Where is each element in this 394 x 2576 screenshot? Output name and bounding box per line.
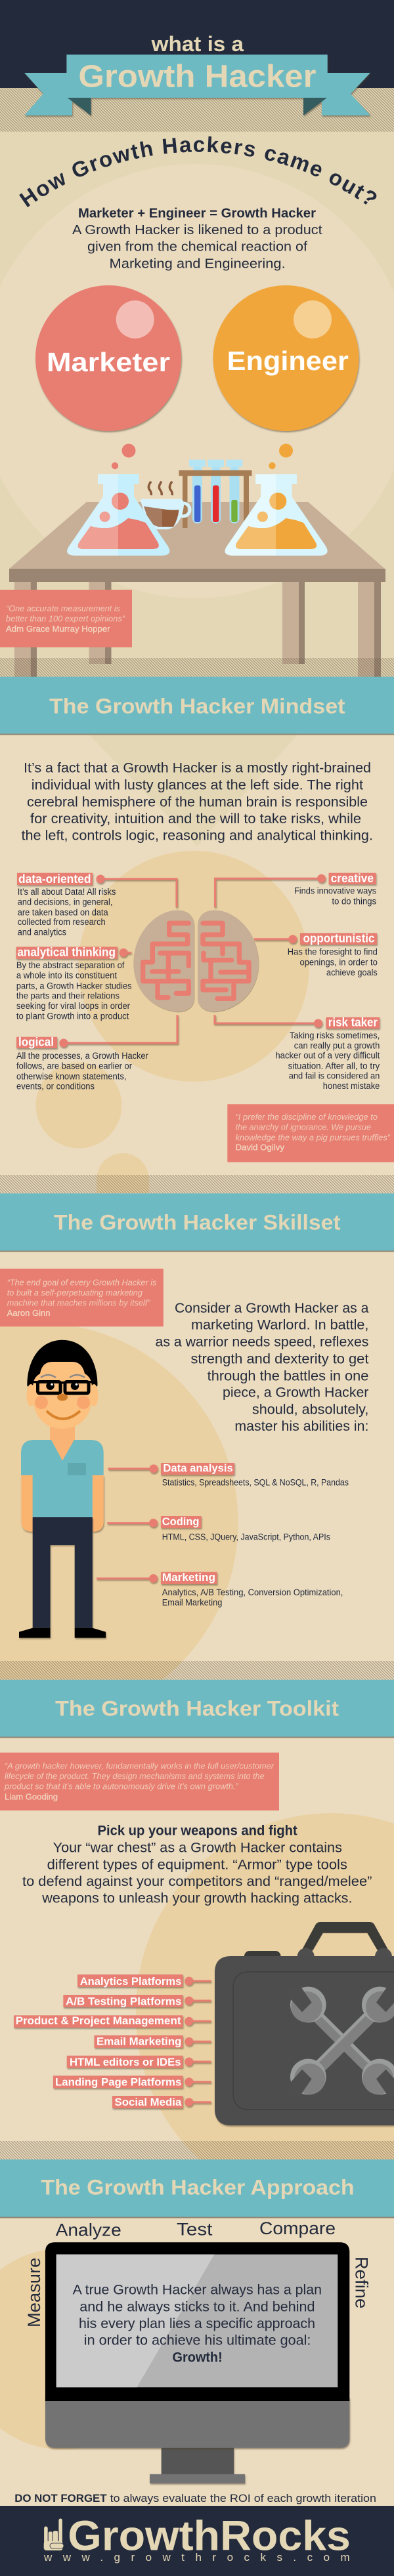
skillset paragraph: should, absolutely,: [252, 1402, 368, 1417]
glasses: [33, 1381, 93, 1393]
callout: opportunistic: [254, 932, 378, 977]
callout: data-oriented: are taken based on data: [18, 907, 108, 917]
callout: logical: All the processes, a Growth Hacker: [16, 1051, 148, 1061]
cycle labels: Analyze: [56, 2220, 121, 2239]
what is a heading: what is a: [151, 32, 244, 56]
panel: toolkit header: The Growth Hacker Toolkit: [55, 1697, 339, 1721]
toolkit paragraph: weapons to unleash your growth hacking attacks.: [41, 1891, 353, 1906]
reaction drops: [112, 443, 293, 469]
face: [33, 1362, 92, 1429]
callout: analytical thinking: to plant Growth into a product: [16, 1012, 129, 1021]
panel: approach header: [0, 2159, 394, 2218]
engineer circle: [213, 285, 359, 431]
tool: email marketing: Email Marketing: [97, 2035, 181, 2047]
skillset paragraph: as a warrior needs speed, reflexes: [155, 1335, 368, 1350]
callout: creative: [215, 872, 376, 907]
callout: data-oriented: and analytics: [18, 928, 66, 937]
callout: analytical thinking: analytical thinking: [17, 945, 116, 958]
quote: Ogilvy: [227, 1104, 394, 1162]
mindset paragraph: cerebral hemisphere of the human brain is responsible: [27, 794, 368, 809]
callout: data-oriented: [17, 872, 177, 937]
monitor text: and he always sticks to it. And behind: [79, 2299, 315, 2314]
monitor text: his every plan lies a specific approach: [79, 2316, 315, 2331]
callout: analytical thinking: parts, a Growth Hacker studies: [16, 981, 132, 991]
cycle labels: Test: [177, 2220, 213, 2239]
toolbox body: [215, 1956, 394, 2125]
callout: analytical thinking: the parts and their relations: [16, 991, 120, 1000]
skill: marketing: Analytics, A/B Testing, Conversion Optimization,: [162, 1587, 343, 1597]
tool: a/b testing platforms: A/B Testing Platforms: [66, 1995, 181, 2008]
skillset paragraph: marketing Warlord. In battle,: [191, 1318, 368, 1333]
toolkit paragraph: Your “war chest” as a Growth Hacker contains: [53, 1840, 342, 1855]
crossed wrenches: [288, 1986, 394, 2096]
tool: social media: [112, 2096, 211, 2108]
panel: toolkit header: [0, 1680, 394, 1738]
callout: logical: otherwise known statements,: [16, 1071, 126, 1081]
quote: Ogilvy: “I prefer the discipline of knowledge to: [236, 1112, 378, 1122]
skill: data analysis: Statistics, Spreadsheets, SQL & NoSQL, R, Pandas: [162, 1478, 349, 1488]
mindset paragraph: for creativity, intuition and the will to take risks, while: [30, 811, 361, 827]
tool: product and project management: Product & Project Management: [16, 2014, 181, 2027]
callout: risk taker: [215, 1015, 380, 1091]
skill: coding: HTML, CSS, JQuery, JavaScript, Python, APIs: [162, 1532, 330, 1542]
quote: Ogilvy: David Ogilvy: [236, 1143, 285, 1153]
tube blue: [189, 460, 206, 523]
trousers: [33, 1517, 93, 1628]
callout: data-oriented: data-oriented: [18, 872, 91, 886]
cycle labels: Compare: [259, 2218, 336, 2238]
panel: how growth hackers came out: [0, 131, 394, 677]
flask: marketing: [67, 474, 169, 556]
skill: coding: [107, 1515, 330, 1542]
callout: risk taker: honest mistake: [323, 1081, 380, 1091]
panel: skillset header: [0, 1193, 394, 1252]
quote: Gooding: lifecycle of the product. They design mechanisms and systems into the: [5, 1771, 265, 1781]
panel: mindset header: [0, 677, 394, 735]
panel: mindset: [0, 735, 394, 1193]
tube green: [227, 460, 242, 523]
coffee cup: [141, 481, 190, 529]
panel: mindset header: The Growth Hacker Mindset: [49, 695, 345, 718]
monitor chin: [45, 2398, 349, 2448]
quote: Ginn: to built a self-perpetuating marketing: [7, 1288, 143, 1298]
callout: risk taker: situation. After all, to try: [288, 1061, 380, 1071]
hair: [27, 1340, 97, 1394]
panel: skillset: [0, 1269, 394, 1680]
skill: marketing: [97, 1571, 343, 1608]
quote: Ginn: [0, 1269, 164, 1326]
skill: marketing: Email Marketing: [162, 1598, 222, 1608]
toolkit paragraph: to defend against your competitors and “ranged/melee”: [22, 1874, 372, 1889]
callout: risk taker: can really put a growth: [294, 1041, 380, 1051]
mindset paragraph: It’s a fact that a Growth Hacker is a mostly right-brained: [24, 760, 371, 775]
panel: skillset header: The Growth Hacker Skillset: [54, 1210, 341, 1234]
callout: analytical thinking: [16, 945, 132, 1021]
tool: analytics platforms: Analytics Platforms: [80, 1975, 181, 1988]
main title: Growth Hacker: [78, 60, 316, 94]
brain icon: [133, 910, 259, 1012]
quote: Ginn: machine that reaches millions by itself”: [7, 1298, 150, 1308]
intro text: Marketing and Engineering.: [109, 256, 286, 272]
skillset paragraph: strength and dexterity to get: [190, 1351, 369, 1366]
intro text: Marketer + Engineer = Growth Hacker: [78, 206, 316, 221]
quote: Ginn: “The end goal of every Growth Hacker is: [7, 1277, 157, 1287]
cycle labels: [24, 2218, 372, 2327]
quote: Hopper: “One accurate measurement is: [6, 603, 120, 613]
quote: Hopper: Adm Grace Murray Hopper: [6, 624, 110, 634]
callout: logical: logical: [18, 1035, 54, 1048]
footer: [0, 2506, 394, 2576]
mindset paragraph: the left, controls logic, reasoning and analytical thinking.: [21, 828, 373, 844]
monitor text: A true Growth Hacker always has a plan: [73, 2283, 322, 2298]
toolbox latch: [244, 1951, 281, 1963]
curved heading: How Growth Hackers came out?: [19, 136, 377, 207]
flask: engineering: [225, 474, 328, 556]
mindset paragraph: individual with lusty glances at the left side. The right: [32, 777, 363, 792]
reminder text: to always evaluate the ROI of each growth iteration: [110, 2492, 376, 2504]
tool: social media: Social Media: [114, 2096, 182, 2108]
test tube rack: [179, 460, 252, 528]
skill: coding: Coding: [162, 1515, 200, 1528]
callout: creative: creative: [331, 872, 374, 885]
panel: toolkit: [0, 1753, 394, 2159]
callout: risk taker: Taking risks sometimes,: [290, 1031, 380, 1040]
smile: [47, 1411, 80, 1419]
neck: [50, 1420, 75, 1441]
skill: data analysis: [108, 1462, 349, 1488]
skill: marketing: Marketing: [162, 1571, 215, 1584]
quote: Ginn: Aaron Ginn: [7, 1308, 51, 1318]
marketer circle: [35, 285, 181, 431]
quote: Gooding: Liam Gooding: [5, 1791, 58, 1801]
callout: opportunistic: achieve goals: [326, 968, 378, 977]
quote: Hopper: [0, 590, 132, 647]
toolkit paragraph: Pick up your weapons and fight: [97, 1824, 297, 1839]
monitor text: Growth!: [172, 2350, 223, 2365]
ribbon shape: [24, 54, 370, 115]
toolkit paragraph: different types of equipment. “Armor” type tools: [47, 1857, 347, 1872]
skillset paragraph: Consider a Growth Hacker as a: [175, 1301, 369, 1316]
panel: approach: [0, 2218, 376, 2504]
callout: analytical thinking: a whole into its constituent: [16, 971, 117, 981]
quote: Gooding: [0, 1753, 279, 1810]
cheeks: [35, 1396, 90, 1409]
callout: creative: to do things: [332, 896, 376, 906]
skillset paragraph: piece, a Growth Hacker: [223, 1385, 368, 1400]
callout: data-oriented: collected from research: [18, 917, 106, 927]
callout: logical: [16, 1015, 177, 1091]
shirt and arms: [21, 1475, 104, 1532]
skill: data analysis: Data analysis: [163, 1462, 233, 1474]
cycle labels: Refine: [352, 2257, 372, 2308]
website url: www.growthrocks.com: [43, 2551, 350, 2564]
skillset paragraph: master his abilities in:: [234, 1419, 368, 1434]
panel: approach header: The Growth Hacker Approach: [41, 2176, 355, 2199]
callout: logical: follows, are based on earlier or: [16, 1061, 132, 1071]
tool: landing page platforms: Landing Page Platforms: [55, 2075, 181, 2088]
callout: data-oriented: It’s all about Data! All risks: [18, 887, 116, 897]
quote: Gooding: “A growth hacker however, fundamentally works in the full user/customer: [5, 1761, 274, 1771]
callout: opportunistic: opportunistic: [303, 932, 374, 945]
ears: [26, 1384, 98, 1406]
table: [9, 502, 385, 677]
monitor screen: [56, 2255, 338, 2387]
quote: Gooding: product so that it’s able to autonomously drive it’s own growth.”: [4, 1782, 238, 1791]
intro text: [72, 206, 322, 272]
tube red: [208, 460, 224, 523]
callout: risk taker: risk taker: [328, 1016, 378, 1029]
skillset paragraph: through the battles in one: [208, 1368, 368, 1383]
quote: Ogilvy: knowledge the way a pig pursues truffles”: [236, 1132, 391, 1142]
intro text: A Growth Hacker is likened to a product: [72, 222, 322, 237]
monitor: [45, 2242, 349, 2484]
toolbox handle: [297, 1922, 392, 1965]
callout: opportunistic: Has the foresight to find: [288, 947, 378, 957]
mindset paragraph: [21, 760, 373, 844]
reminder text: DO NOT FORGET: [14, 2492, 107, 2504]
callout: risk taker: and fail is considered an: [289, 1071, 380, 1081]
tool: html editors: HTML editors or IDEs: [70, 2056, 181, 2068]
icon: rock hand: [44, 2518, 64, 2550]
callout: logical: events, or conditions: [16, 1081, 95, 1091]
callout: opportunistic: openings, in order to: [299, 957, 378, 967]
callout: analytical thinking: By the abstract separation of: [16, 960, 125, 970]
toolkit paragraph: [22, 1824, 372, 1906]
cycle labels: Measure: [24, 2258, 44, 2327]
quote: Hopper: better than 100 expert opinions”: [6, 614, 125, 624]
header ribbon: [24, 32, 370, 115]
reminder text: [14, 2492, 376, 2504]
intro text: given from the chemical reaction of: [87, 239, 307, 255]
monitor text: [73, 2283, 322, 2365]
eyebrows: [41, 1375, 85, 1378]
monitor stand: [150, 2447, 245, 2484]
quote: Ogilvy: the anarchy of ignorance. We pursue: [236, 1122, 371, 1132]
icon: toolbox: [215, 1922, 394, 2125]
nose: [57, 1393, 68, 1401]
engineer circle: Engineer: [227, 346, 349, 376]
logo wordmark: GrowthRocks: [68, 2512, 351, 2560]
skillset paragraph: [155, 1301, 369, 1434]
callout: data-oriented: and decisions, in general,: [18, 897, 112, 907]
marketer circle: Marketer: [47, 347, 170, 377]
shoes: [19, 1628, 106, 1638]
callout: analytical thinking: seeking for viral loops in order: [16, 1001, 130, 1011]
monitor text: in order to achieve his ultimate goal:: [84, 2333, 311, 2348]
monitor bezel: [45, 2242, 349, 2401]
callout: risk taker: hacker out of a very difficult: [275, 1051, 380, 1061]
callout: creative: Finds innovative ways: [294, 886, 376, 896]
character: growth hacker: [19, 1340, 106, 1638]
